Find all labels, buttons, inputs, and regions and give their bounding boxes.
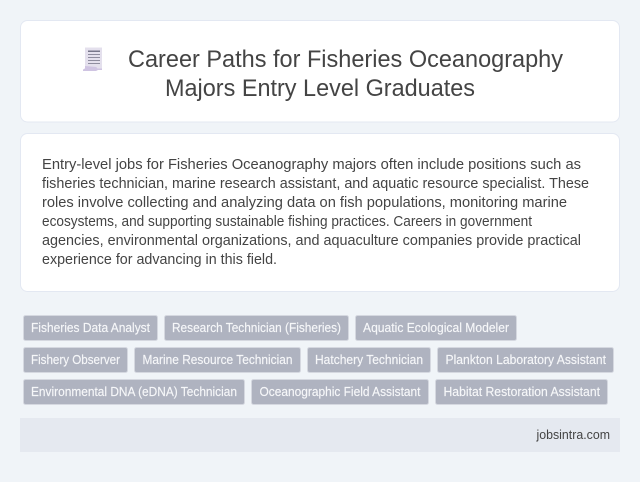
text block: description: fisheries technician, marine research assistant, and aquatic resource specialist. These [42, 176, 589, 192]
footer text: site name: jobsintra.com [536, 428, 610, 442]
tag [24, 380, 244, 404]
tag [24, 348, 128, 372]
tag: Research Technician (Fisheries) [172, 320, 341, 335]
tag: Aquatic Ecological Modeler [363, 320, 510, 335]
tag: Fishery Observer [31, 352, 121, 367]
panel: title card [20, 20, 620, 122]
tag [356, 316, 516, 340]
tag: Oceanographic Field Assistant [260, 384, 421, 399]
title [128, 46, 564, 102]
tag [164, 316, 348, 340]
text block: description: experience for advancing in this field. [42, 252, 277, 268]
text block: description: agencies, environmental organizations, and aquaculture companies provide practical [42, 233, 581, 249]
tag: Hatchery Technician [315, 352, 423, 367]
footer [20, 418, 620, 452]
tag: Plankton Laboratory Assistant [446, 352, 606, 367]
title: Majors Entry Level Graduates [165, 75, 475, 102]
tag [436, 380, 608, 404]
panel: description [20, 134, 620, 292]
text block: description: roles involve collecting and analyzing data on fish populations, monitoring marine [42, 195, 567, 211]
text block: description: Entry-level jobs for Fisheries Oceanography majors often include positions such as [42, 157, 581, 173]
tag: Habitat Restoration Assistant [444, 384, 600, 399]
title: Career Paths for Fisheries Oceanography [128, 46, 564, 73]
icon: scroll document [83, 48, 102, 71]
tag: Marine Resource Technician [142, 352, 292, 367]
tag: Environmental DNA (eDNA) Technician [31, 384, 237, 399]
tag [438, 348, 614, 372]
text block: description: ecosystems, and supporting sustainable fishing practices. Careers in government [42, 214, 532, 230]
tag [252, 380, 428, 404]
text block: description [42, 157, 589, 268]
tag [134, 348, 300, 372]
tags: career paths [24, 316, 614, 404]
tag: Fisheries Data Analyst [31, 320, 150, 335]
tag [24, 316, 158, 340]
tag [308, 348, 430, 372]
